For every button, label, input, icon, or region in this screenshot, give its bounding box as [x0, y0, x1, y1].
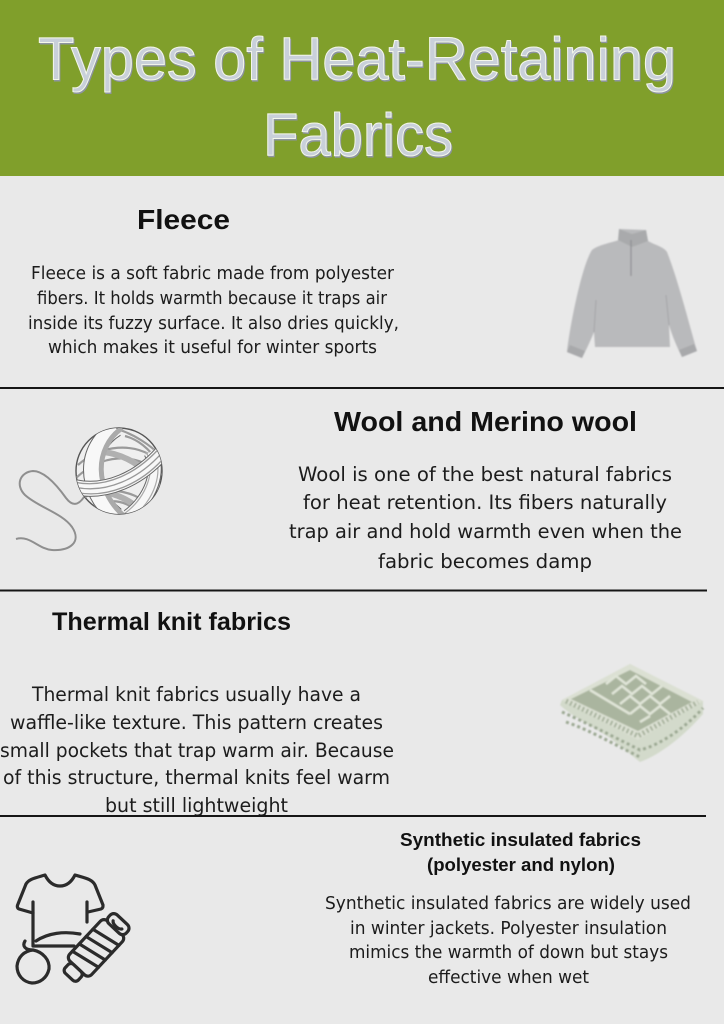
text: wool description: trap air and hold warmth even when the — [289, 520, 682, 543]
text: thermal knit description — [0, 683, 394, 817]
heading: wool: Wool and Merino wool — [334, 406, 637, 437]
icon: grey fleece sweater — [567, 229, 697, 358]
heading: synthetic insulated: (polyester and nylon) — [427, 854, 615, 875]
text: wool description: for heat retention. Its fibers naturally — [303, 491, 667, 514]
divider line 1 — [0, 387, 724, 389]
text: fleece description: inside its fuzzy surface. It also dries quickly, — [28, 314, 399, 334]
text: synthetic description: in winter jackets. Polyester insulation — [350, 919, 667, 939]
text: fleece description: Fleece is a soft fabric made from polyester — [31, 264, 395, 284]
text: fleece description: fibers. It holds warmth because it traps air — [37, 289, 388, 309]
heading: synthetic insulated: Synthetic insulated fabrics — [400, 829, 641, 850]
text: thermal knit description: but still lightweight — [105, 794, 288, 817]
title: Types of Heat-Retaining — [38, 26, 676, 92]
text: synthetic description: Synthetic insulated fabrics are widely used — [325, 894, 691, 914]
panel: synthetic insulated fabrics — [17, 829, 691, 988]
text: fleece description: which makes it useful for winter sports — [48, 338, 377, 358]
title — [38, 26, 677, 170]
text: thermal knit description: of this structure, thermal knits feel warm — [3, 766, 390, 789]
text: synthetic description: mimics the warmth of down but stays — [349, 943, 668, 963]
heading: synthetic insulated — [400, 829, 641, 875]
panel: wool and merino wool — [16, 406, 682, 573]
title: Types of Heat-Retaining — [39, 27, 677, 94]
text: thermal knit description: Thermal knit fabrics usually have a — [31, 683, 361, 706]
icon: folded green knit blanket — [560, 664, 703, 762]
text: synthetic description: effective when wet — [428, 968, 589, 988]
title: Fabrics — [264, 103, 454, 170]
text: thermal knit description: small pockets that trap warm air. Because — [0, 739, 394, 762]
title banner — [0, 0, 724, 176]
text: fleece description — [28, 264, 399, 358]
title: Fabrics — [263, 102, 453, 168]
divider line 2 — [0, 590, 707, 592]
icon: t-shirt with thread spool — [17, 875, 133, 987]
text: thermal knit description: waffle-like texture. This pattern creates — [10, 711, 383, 734]
heading: thermal knit: Thermal knit fabrics — [52, 608, 291, 636]
text: wool description — [289, 463, 682, 573]
divider line 3 — [0, 815, 706, 817]
text: wool description: Wool is one of the best natural fabrics — [298, 463, 672, 486]
heading: fleece: Fleece — [137, 204, 230, 235]
icon: ball of yarn — [16, 428, 169, 550]
text: synthetic description — [325, 894, 691, 988]
text: wool description: fabric becomes damp — [378, 550, 592, 573]
panel: fleece — [28, 204, 697, 358]
panel: thermal knit fabrics — [0, 608, 703, 817]
